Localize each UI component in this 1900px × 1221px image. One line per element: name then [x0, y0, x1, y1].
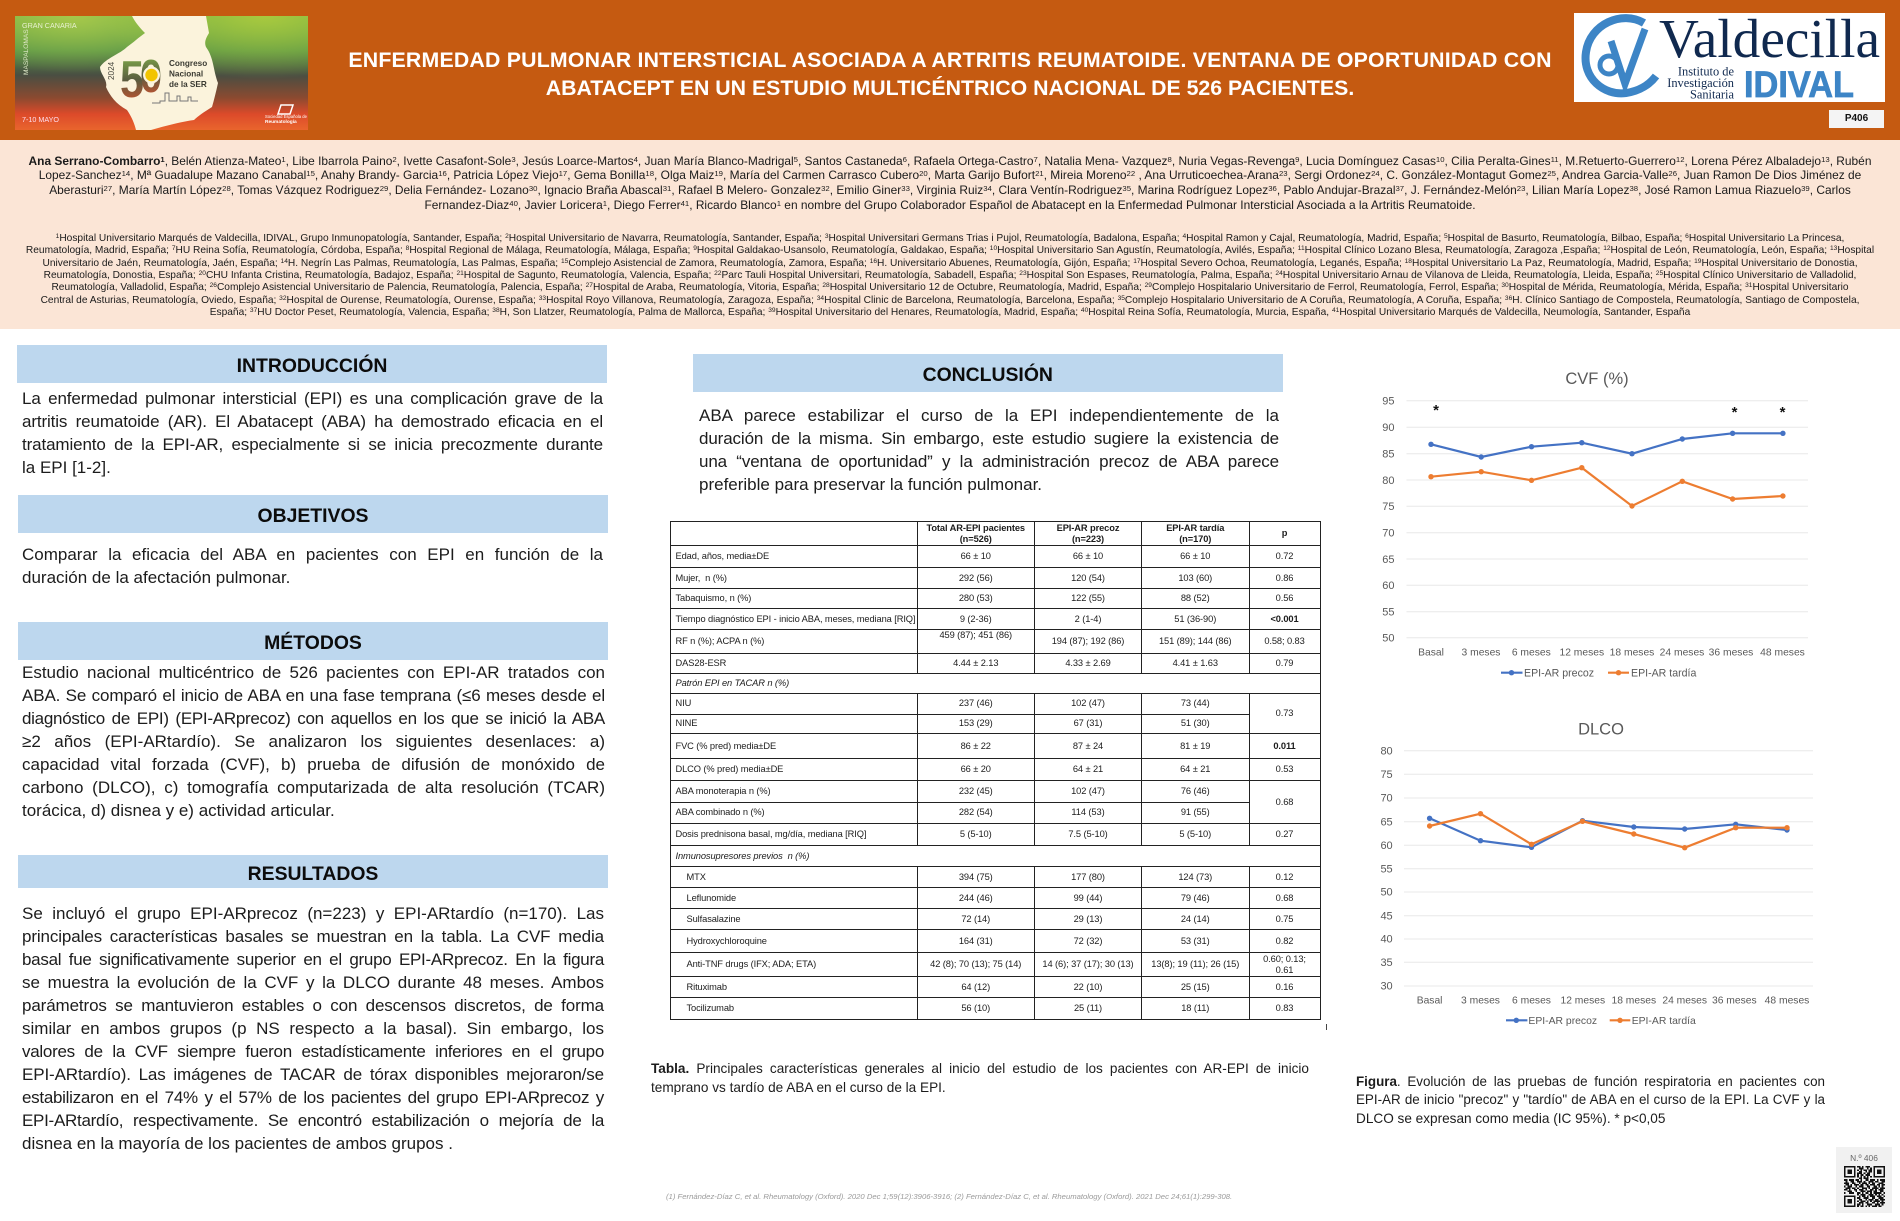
- heading: introducción: [17, 345, 607, 383]
- table: baseline characteristics: 66 ± 10: [1180, 551, 1210, 561]
- authors: Aberasturi27, María Martín López28, Tomas Vázquez Rodriguez29, Delia Fernández- Lozano30, Ignacio Braña Abascal31, Rafael B Melero- Gonzalez32, Emilio Giner33, Virginia Ruiz34, Clara Ventín-Rodriguez35, Marina Rodríguez Lopez36, Pablo Andujar-Brazal37, J. Fernández-Melón23, Lilian María Lopez38, José Ramon Lamua Riazuelo39, Carlos: [49, 183, 1851, 197]
- table: baseline characteristics: 0.12: [1276, 872, 1293, 882]
- logo: Valdecilla IDIVAL: Investigación: [1667, 76, 1734, 90]
- table: baseline characteristics: MTX: [686, 872, 706, 882]
- x axis labels: 3 meses: [1462, 648, 1500, 658]
- congress text: 7-10 MAYO: [22, 115, 59, 124]
- text: resultados: valores de la CVF siempre fueron estadísticamente inferiores en el grupo: [22, 1042, 604, 1061]
- table: baseline characteristics: 79 (46): [1181, 892, 1210, 902]
- table: baseline characteristics: 103 (60): [1178, 572, 1212, 582]
- y axis labels: 55: [1380, 864, 1393, 876]
- y axis labels: 40: [1380, 934, 1393, 946]
- table: baseline characteristics: 42 (8); 70 (13); 75 (14): [930, 959, 1021, 969]
- x axis labels: 24 meses: [1662, 996, 1707, 1006]
- table: baseline characteristics: 81 ± 19: [1180, 740, 1210, 750]
- significance stars: [1433, 402, 1786, 421]
- figure caption: [1356, 1074, 1825, 1126]
- table caption: Tabla. Principales características generales al inicio del estudio de los pacientes con AR-EPI de inicio: [651, 1061, 1309, 1076]
- heading: métodos: MÉTODOS: [264, 632, 362, 654]
- text: resultados: Se incluyó el grupo EPI-ARprecoz (n=223) y EPI-ARtardío (n=170). Las: [22, 904, 604, 923]
- text: objetivos: duración de la afectación pulmonar.: [22, 568, 290, 587]
- table: baseline characteristics: Anti-TNF drugs (IFX; ADA; ETA): [686, 959, 816, 969]
- table: baseline characteristics: 0.79: [1276, 658, 1293, 668]
- table: baseline characteristics: 102 (47): [1071, 698, 1105, 708]
- table: baseline characteristics: 0.72: [1276, 551, 1293, 561]
- table: baseline characteristics: 67 (31): [1074, 718, 1102, 728]
- table: baseline characteristics: 4.44 ± 2.13: [953, 658, 998, 668]
- table: baseline characteristics: Tabaquismo, n (%): [676, 593, 751, 603]
- x axis labels: 24 meses: [1660, 648, 1704, 658]
- y axis labels: 75: [1380, 769, 1393, 781]
- text: métodos: ≥2 años (EPI-ARtardío). Se analizaron los siguientes desenlaces: a): [22, 732, 605, 751]
- congress text: GRAN CANARIA: [22, 21, 77, 30]
- table: baseline characteristics: Tiempo diagnóstico EPI - inicio ABA, meses, mediana [RIQ]: [676, 614, 915, 624]
- table: baseline characteristics: 64 (12): [961, 982, 990, 992]
- text: objetivos: Comparar la eficacia del ABA en pacientes con EPI en función de la: [22, 545, 603, 564]
- table: baseline characteristics: 5 (5-10): [1179, 829, 1211, 839]
- authors: Lopez-Sanchez14, Mª Guadalupe Mazano Canabal15, Anahy Brandy- Garcia16, Patricia López Viejo17, Gema Bonilla18, Olga Maiz19, María del Carmen Carrasco Cubero20, Marta Garijo Bufort21, Mireia Moreno22 , Ana Urruticoechea-Arana23, Sergi Ordonez24, C. González-Montagut Gomez25, Andrea Garcia-Valle26, Juan Ramon De Dios Jiménez de: [39, 168, 1861, 182]
- table: baseline characteristics: 120 (54): [1071, 572, 1105, 582]
- table: baseline characteristics: 459 (87); 451 (86): [939, 630, 1012, 640]
- x axis labels: 18 meses: [1610, 648, 1654, 658]
- table: baseline characteristics: 56 (10): [961, 1003, 990, 1013]
- logo: 50 Congreso Nacional de la SER: de la SER: [169, 80, 207, 89]
- table: baseline characteristics: 4.33 ± 2.69: [1065, 658, 1111, 668]
- table: baseline characteristics: ABA monoterapia n (%): [676, 786, 771, 796]
- text: resultados: basal fue significativamente superior en el grupo EPI-ARprecoz. En la figura: [22, 950, 604, 969]
- table: baseline characteristics: 394 (75): [959, 872, 993, 882]
- table: baseline characteristics: p: [1282, 528, 1287, 538]
- authors: Ana Serrano-Combarro1, Belén Atienza-Mateo1, Libe Ibarrola Paino2, Ivette Casafont-Sole3, Jesús Loarce-Martos4, Juan María Blanco-Madrigal5, Santos Castaneda6, Rafaela Ortega-Castro7, Natalia Mena- Vazquez8, Nuria Vegas-Revenga9, Lucia Domínguez Casas10, Cilia Peralta-Gines11, M.Retuerto-Guerrero12, Lorena Pérez Albaladejo13, Rubén: [29, 154, 1871, 168]
- x axis labels: [1417, 996, 1809, 1006]
- legend: EPI-AR tardía: [1632, 1016, 1696, 1027]
- table: baseline characteristics: Mujer, n (%): [676, 572, 727, 582]
- line: EPI-AR tardía: [1428, 465, 1786, 509]
- authors: [28, 154, 1871, 212]
- affiliations: Central de Asturias, Reumatología, Oviedo, España; 32Hospital de Ourense, Reumatología, Ourense, España; 33Hospital Royo Villanova, Reumatología, Zaragoza, España; 34Hospital Clinic de Barcelona, Reumatología, Barcelona, España; 35Complejo Hospitalario Universitario de A Coruña, Reumatología, A Coruña, España; 36H. Clínico Santiago de Compostela, Reumatología, Santiago de Compostela,: [41, 294, 1859, 306]
- y axis labels: 30: [1380, 981, 1393, 993]
- text: conclusión: duración de la misma. Sin embargo, este estudio sugiere la existencia de: [699, 429, 1279, 448]
- y axis labels: 50: [1380, 887, 1393, 899]
- poster number: N.º 406: [1850, 1153, 1878, 1163]
- y axis labels: 65: [1382, 554, 1394, 566]
- text: introducción: la EPI [1-2].: [22, 458, 111, 477]
- table: baseline characteristics: 0.83: [1276, 1003, 1293, 1013]
- table: baseline characteristics: 66 ± 20: [961, 764, 991, 774]
- y axis labels: 55: [1382, 606, 1394, 618]
- y axis labels: 90: [1382, 422, 1394, 434]
- table: baseline characteristics: 0.16: [1276, 982, 1293, 992]
- x axis labels: 48 meses: [1765, 996, 1809, 1006]
- table: baseline characteristics: (n=526): [960, 534, 992, 544]
- logo: 50 Congreso Nacional de la SER: Sociedad Española de: [265, 114, 308, 119]
- table: baseline characteristics: 86 ± 22: [961, 740, 991, 750]
- y axis labels: 60: [1380, 840, 1393, 852]
- logo: 50 Congreso Nacional de la SER: Reumatología: [265, 119, 297, 125]
- table: baseline characteristics: 0.53: [1276, 764, 1293, 774]
- legend: EPI-AR precoz: [1528, 1016, 1597, 1027]
- affiliations: Universitario de Jaén, Reumatología, Jaén, España; 14H. Negrín Las Palmas, Reumatología, Las Palmas, España; 15Complejo Asistencial de Zamora, Reumatología, Zamora, España; 16H. Universitario Abuenes, Reumatología, Gijón, España; 17Hospital Severo Ochoa, Reumatología, Leganés, España; 18Hospital Universitario La Paz, Reumatología, Madrid, España; 19Hospital Universitario de Donostia,: [42, 258, 1858, 269]
- x axis labels: [1418, 648, 1805, 658]
- table: baseline characteristics: 51 (30): [1181, 718, 1210, 728]
- x axis labels: 36 meses: [1709, 648, 1753, 658]
- table: baseline characteristics: FVC (% pred) media±DE: [676, 740, 776, 750]
- table: baseline characteristics: 88 (52): [1181, 593, 1210, 603]
- y axis labels: 45: [1380, 910, 1393, 922]
- table: baseline characteristics: 18 (11): [1181, 1003, 1209, 1013]
- figure caption: DLCO se expresan como media (IC 95%). * p<0,05: [1356, 1110, 1665, 1126]
- authors: Fernandez-Diaz40, Javier Loricera1, Diego Ferrer41, Ricardo Blanco1 en nombre del Grupo Colaborador Español de Abatacept en la Enfermedad Pulmonar Intersticial Asociada a la Artritis Reumatoide.: [424, 198, 1476, 212]
- table: baseline characteristics: Rituximab: [686, 982, 727, 992]
- text: métodos: Estudio nacional multicéntrico de 526 pacientes con EPI-AR tratados con: [22, 663, 605, 682]
- table: baseline characteristics: Tocilizumab: [686, 1003, 734, 1013]
- text: métodos: torácica, d) disnea y e) actividad articular.: [22, 801, 335, 820]
- text: conclusión: una “ventana de oportunidad” y la administración precoz de ABA parece: [699, 452, 1279, 471]
- logo: 50 Congreso Nacional de la SER: Nacional: [169, 70, 203, 78]
- y axis labels: 65: [1380, 816, 1393, 828]
- table: baseline characteristics: 280 (53): [959, 593, 993, 603]
- text: conclusión: ABA parece estabilizar el curso de la EPI independientemente de la: [699, 406, 1279, 425]
- x axis labels: 36 meses: [1712, 996, 1757, 1006]
- text: introducción: tratamiento de la EPI-AR, especialmente si se inicia precozmente durante: [22, 435, 603, 454]
- poster number badge: [1829, 110, 1884, 128]
- y axis labels: 60: [1382, 580, 1394, 592]
- text: conclusión: preferible para preservar la función pulmonar.: [699, 475, 1042, 494]
- table: baseline characteristics: 25 (11): [1074, 1003, 1102, 1013]
- heading: resultados: RESULTADOS: [248, 863, 378, 885]
- legend: [1506, 1016, 1696, 1027]
- title: [348, 48, 1552, 100]
- table: baseline characteristics: 0.61: [1276, 964, 1293, 974]
- logo: 50 Congreso Nacional de la SER: 0: [140, 50, 162, 102]
- table: baseline characteristics: 0.73: [1276, 708, 1293, 718]
- table: baseline characteristics: 72 (14): [961, 914, 990, 924]
- line: EPI-AR precoz: [1427, 816, 1790, 850]
- table: baseline characteristics: 177 (80): [1071, 872, 1105, 882]
- table: baseline characteristics: RF n (%); ACPA n (%): [676, 636, 764, 646]
- table: baseline characteristics: Sulfasalazine: [686, 914, 741, 924]
- heading: objetivos: [18, 495, 608, 533]
- text: resultados: disnea en la mayoría de los pacientes de ambos grupos .: [22, 1134, 453, 1153]
- table: baseline characteristics: DAS28-ESR: [676, 658, 726, 668]
- heading: objetivos: OBJETIVOS: [258, 504, 368, 526]
- text: objetivos: [22, 545, 603, 587]
- chart: DLCO: [1380, 720, 1813, 1027]
- y axis labels: [1380, 746, 1393, 993]
- table: baseline characteristics: 0.60; 0.13;: [1263, 954, 1306, 964]
- y axis labels: 80: [1382, 475, 1394, 487]
- logo: Valdecilla IDIVAL: [1574, 13, 1885, 102]
- table: baseline characteristics: 64 ± 21: [1073, 764, 1103, 774]
- figure caption: Figura. Evolución de las pruebas de función respiratoria en pacientes con: [1356, 1074, 1825, 1088]
- heading: métodos: [18, 622, 608, 660]
- table: baseline characteristics: 151 (89); 144 (86): [1159, 636, 1232, 646]
- table: baseline characteristics: 66 ± 10: [961, 551, 991, 561]
- table: baseline characteristics: 102 (47): [1071, 786, 1105, 796]
- title: ENFERMEDAD PULMONAR INTERSTICIAL ASOCIADA A ARTRITIS REUMATOIDE. VENTANA DE OPORTUNIDAD CON: [348, 48, 1552, 72]
- legend: EPI-AR tardía: [1631, 668, 1696, 680]
- logo: 50 Congreso Nacional de la SER: 5: [120, 51, 144, 109]
- text: introducción: [22, 389, 604, 477]
- x axis labels: 3 meses: [1461, 996, 1500, 1006]
- x axis labels: 12 meses: [1560, 996, 1605, 1006]
- text: resultados: EPI-ARtardío, respectivamente. Se encontró estabilización o mejoría de la: [22, 1111, 604, 1130]
- table: baseline characteristics: 0.56: [1276, 593, 1293, 603]
- line: EPI-AR tardía: [1427, 811, 1790, 850]
- table: baseline characteristics: 237 (46): [959, 698, 993, 708]
- poster number badge: P406: [1845, 113, 1868, 124]
- table: baseline characteristics: 91 (55): [1181, 807, 1210, 817]
- table: baseline characteristics: 114 (53): [1071, 807, 1105, 817]
- table: baseline characteristics: 9 (2-36): [960, 614, 992, 624]
- references: (1) Fernández-Díaz C, et al. Rheumatology (Oxford). 2020 Dec 1;59(12):3906-3916; (2) Fernández-Díaz C, et al. Rheumatology (Oxford). 2021 Dec 24;61(1):299-308.: [666, 1192, 1232, 1201]
- legend: [1501, 668, 1696, 680]
- affiliations: Reumatología, Donostia, España; 20CHU Infanta Cristina, Reumatología, Badajoz, España; 21Hospital de Sagunto, Reumatología, Valencia, España; 22Parc Tauli Hospital Universitari, Reumatología, Sabadell, España; 23Hospital Son Espases, Reumatología, Palma, España; 24Hospital Universitario Arnau de Vilanova de Lleida, Reumatología, Lleida, España; 25Hospital Clínico Universitario de Valladolid,: [44, 270, 1856, 281]
- table: baseline characteristics: 292 (56): [959, 572, 993, 582]
- chart: CVF: [1382, 370, 1808, 680]
- significance stars: *: [1780, 404, 1786, 421]
- y axis labels: [1382, 396, 1394, 644]
- table: baseline characteristics: 73 (44): [1181, 698, 1210, 708]
- title: ABATACEPT EN UN ESTUDIO MULTICÉNTRICO NACIONAL DE 526 PACIENTES.: [546, 76, 1354, 100]
- table: baseline characteristics: (n=223): [1072, 534, 1104, 544]
- significance stars: *: [1732, 404, 1738, 421]
- x axis labels: Basal: [1418, 648, 1444, 658]
- table: baseline characteristics: Patrón EPI en TACAR n (%): [676, 678, 789, 688]
- congress text: [22, 21, 77, 124]
- table: baseline characteristics: 164 (31): [959, 936, 993, 946]
- affiliations: [26, 233, 1874, 318]
- logo: Valdecilla IDIVAL: Sanitaria: [1690, 88, 1734, 102]
- table: baseline characteristics: 24 (14): [1181, 914, 1210, 924]
- table: baseline characteristics: 72 (32): [1074, 936, 1102, 946]
- header band: [0, 0, 1900, 140]
- text: resultados: EPI-ARtardío). Las imágenes de TACAR de tórax disponibles mejoraron/se: [22, 1065, 604, 1084]
- table: baseline characteristics: 194 (87); 192 (86): [1052, 636, 1124, 646]
- figure caption: EPI-AR de inicio "precoz" y "tardío" de ABA en el curso de la EPI. La CVF y la: [1356, 1092, 1825, 1107]
- table: baseline characteristics: 4.41 ± 1.63: [1173, 658, 1218, 668]
- text: resultados: principales características basales se muestran en la tabla. La CVF media: [22, 927, 604, 946]
- island shape: [100, 16, 218, 130]
- table: baseline characteristics: 0.27: [1276, 829, 1293, 839]
- table: baseline characteristics: 0.011: [1273, 740, 1296, 750]
- chart title: CVF (%): [1565, 370, 1629, 388]
- logo: 50 Congreso Nacional de la SER: [15, 16, 308, 130]
- chart title: DLCO: [1578, 720, 1624, 738]
- x axis labels: 12 meses: [1559, 648, 1604, 658]
- x axis labels: 6 meses: [1512, 648, 1551, 658]
- text: introducción: La enfermedad pulmonar intersticial (EPI) es una complicación grave de la: [22, 389, 603, 408]
- logo: Valdecilla IDIVAL: Instituto de: [1678, 64, 1734, 78]
- y axis labels: 70: [1382, 528, 1394, 540]
- table: baseline characteristics: 13(8); 19 (11); 26 (15): [1151, 959, 1239, 969]
- y axis labels: 85: [1382, 448, 1394, 460]
- table: baseline characteristics: 25 (15): [1181, 982, 1210, 992]
- table caption: temprano vs tardío de ABA en el curso de la EPI.: [651, 1080, 946, 1095]
- text: métodos: ABA. Se comparó el inicio de ABA en una fase temprana (≤6 meses desde el: [22, 686, 605, 705]
- line: EPI-AR precoz: [1428, 431, 1786, 460]
- table: baseline characteristics: DLCO (% pred) media±DE: [676, 764, 783, 774]
- text: métodos: carbono (DLCO), c) tomografía computarizada de alta resolución (TCAR): [22, 778, 605, 797]
- heading: resultados: [18, 855, 608, 888]
- text: métodos: diagnóstico de EPI) (EPI-ARprecoz) con aquellos en los que se inició la ABA: [22, 709, 605, 728]
- table: baseline characteristics: Total AR-EPI pacientes: [926, 522, 1025, 532]
- table: baseline characteristics: 122 (55): [1071, 593, 1105, 603]
- legend: EPI-AR precoz: [1524, 668, 1594, 680]
- text: introducción: artritis reumatoide (AR). El Abatacept (ABA) ha demostrado eficacia en el: [22, 412, 603, 431]
- table: baseline characteristics: 153 (29): [959, 718, 993, 728]
- table: baseline characteristics: 244 (46): [959, 892, 993, 902]
- logo: 50 Congreso Nacional de la SER: MASPALOMAS: [23, 29, 30, 75]
- QR badge: [1836, 1147, 1892, 1213]
- heading: conclusión: [692, 354, 1283, 392]
- table: baseline characteristics: Dosis prednisona basal, mg/día, mediana [RIQ]: [676, 829, 866, 839]
- y axis labels: 70: [1380, 793, 1393, 805]
- table: baseline characteristics: 0.68: [1276, 892, 1293, 902]
- text: métodos: capacidad vital forzada (CVF), b) prueba de difusión de monóxido de: [22, 755, 605, 774]
- table: baseline characteristics: 0.86: [1276, 572, 1293, 582]
- table: baseline characteristics: Edad, años, media±DE: [676, 551, 769, 561]
- table: baseline characteristics: 87 ± 24: [1073, 740, 1103, 750]
- logo: 50 Congreso Nacional de la SER: Congreso: [169, 59, 207, 68]
- table: baseline characteristics: 232 (45): [959, 786, 993, 796]
- affiliations: 1Hospital Universitario Marqués de Valdecilla, IDIVAL, Grupo Inmunopatología, Santander, España; 2Hospital Universitario de Navarra, Reumatología, Santander, España; 3Hospital Universitari Germans Trias i Pujol, Reumatología, Badalona, España; 4Hospital Ramon y Cajal, Reumatología, Madrid, España; 5Hospital de Basurto, Reumatología, Bilbao, España; 6Hospital Universitario La Princesa,: [56, 233, 1844, 244]
- text: resultados: se muestra la evolución de la CVF y la DLCO durante 48 meses. Ambos: [22, 973, 604, 992]
- affiliations: Reumatología, Madrid, España; 7HU Reina Sofía, Reumatología, Córdoba, España; 8Hospital Regional de Málaga, Reumatología, Málaga, España; 9Hospital Galdakao-Usansolo, Reumatología, Galdakao, España; 10Hospital Universitario San Agustín, Reumatología, Avilés, España; 11Hospital Clínico Lozano Blesa, Reumatología, Zaragoza ,España; 12Hospital de León, Reumatología, León, España; 13Hospital: [26, 245, 1874, 256]
- table: baseline characteristics: 99 (44): [1074, 892, 1102, 902]
- x axis labels: 18 meses: [1611, 996, 1656, 1006]
- text: resultados: [22, 904, 604, 1153]
- significance stars: *: [1433, 402, 1439, 419]
- table: baseline characteristics: <0.001: [1270, 614, 1299, 624]
- table: baseline characteristics: 124 (73): [1178, 872, 1212, 882]
- affiliations: Reumatología, Valladolid, España; 26Complejo Asistencial Universitario de Palencia, Reumatología, Palencia, España; 27Hospital de Araba, Reumatología, Vitoria, España; 28Hospital Universitario 12 de Octubre, Reumatología, Madrid, España; 29Complejo Hospitalario Universitario de Ferrol, Reumatología, Ferrol, España; 30Hospital de Mérida, Reumatología, Mérida, España; 31Hospital Universitario: [51, 282, 1849, 293]
- text: conclusión: [699, 406, 1279, 494]
- y axis labels: 35: [1380, 957, 1393, 969]
- table: baseline characteristics: EPI-AR tardía: [1166, 522, 1224, 532]
- table: baseline characteristics: 14 (6); 37 (17); 30 (13): [1042, 959, 1134, 969]
- y axis labels: 50: [1382, 632, 1394, 644]
- heading: introducción: INTRODUCCIÓN: [237, 354, 387, 376]
- table: baseline characteristics: 282 (54): [959, 807, 993, 817]
- table: baseline characteristics: 7.5 (5-10): [1068, 829, 1108, 839]
- table: baseline characteristics: 0.68: [1276, 796, 1293, 806]
- table: baseline characteristics: 66 ± 10: [1073, 551, 1103, 561]
- text: resultados: parámetros se mantuvieron estables o con descensos discretos, de forma: [22, 996, 604, 1015]
- table: baseline characteristics: 29 (13): [1074, 914, 1102, 924]
- table caption: [651, 1061, 1309, 1095]
- authors and affiliations band: [0, 140, 1900, 329]
- table: baseline characteristics: 2 (1-4): [1075, 614, 1101, 624]
- table: baseline characteristics: 51 (36-90): [1174, 614, 1216, 624]
- text: resultados: similar en ambos grupos (p NS respecto a la basal). Sin embargo, los: [22, 1019, 604, 1038]
- text: resultados: estabilizaron en el 74% y el 57% de los pacientes del grupo EPI-ARprecoz y: [22, 1088, 604, 1107]
- table: baseline characteristics: (n=170): [1179, 534, 1211, 544]
- x axis labels: 6 meses: [1512, 996, 1551, 1006]
- table: baseline characteristics: NINE: [676, 718, 697, 728]
- table: baseline characteristics: 0.82: [1276, 936, 1293, 946]
- table: baseline characteristics: NIU: [676, 698, 691, 708]
- table: baseline characteristics: 5 (5-10): [960, 829, 992, 839]
- table: baseline characteristics: 22 (10): [1074, 982, 1102, 992]
- table: baseline characteristics: 0.75: [1276, 914, 1293, 924]
- x axis labels: 48 meses: [1760, 648, 1805, 658]
- y axis labels: 80: [1380, 746, 1393, 758]
- table: baseline characteristics: [670, 521, 1321, 1020]
- logo: 50 Congreso Nacional de la SER: 2024: [107, 61, 116, 80]
- x axis labels: Basal: [1417, 996, 1442, 1006]
- table: baseline characteristics: 53 (31): [1181, 936, 1210, 946]
- table: baseline characteristics: EPI-AR precoz: [1057, 522, 1119, 532]
- table: baseline characteristics: 76 (46): [1181, 786, 1210, 796]
- table: baseline characteristics: Hydroxychloroquine: [686, 936, 767, 946]
- table: baseline characteristics: ABA combinado n (%): [676, 807, 765, 817]
- table: baseline characteristics: Leflunomide: [686, 892, 736, 902]
- y axis labels: 95: [1382, 396, 1394, 408]
- heading: conclusión: CONCLUSIÓN: [923, 364, 1053, 386]
- text: métodos: [22, 663, 606, 820]
- affiliations: España; 37HU Doctor Peset, Reumatología, Valencia, España; 38H, Son Llatzer, Reumatología, Palma de Mallorca, España; 39Hospital Universitario del Henares, Reumatología, Madrid, España; 40Hospital Reina Sofía, Reumatología, Murcia, España, 41Hospital Universitario Marqués de Valdecilla, Neumología, Santander, España: [210, 307, 1690, 318]
- y axis labels: 75: [1382, 501, 1394, 513]
- icon: QR code: [1844, 1166, 1885, 1207]
- table: baseline characteristics: 64 ± 21: [1180, 764, 1210, 774]
- table: baseline characteristics: Inmunosupresores previos n (%): [676, 850, 809, 860]
- table: baseline characteristics: 0.58; 0.83: [1264, 636, 1305, 646]
